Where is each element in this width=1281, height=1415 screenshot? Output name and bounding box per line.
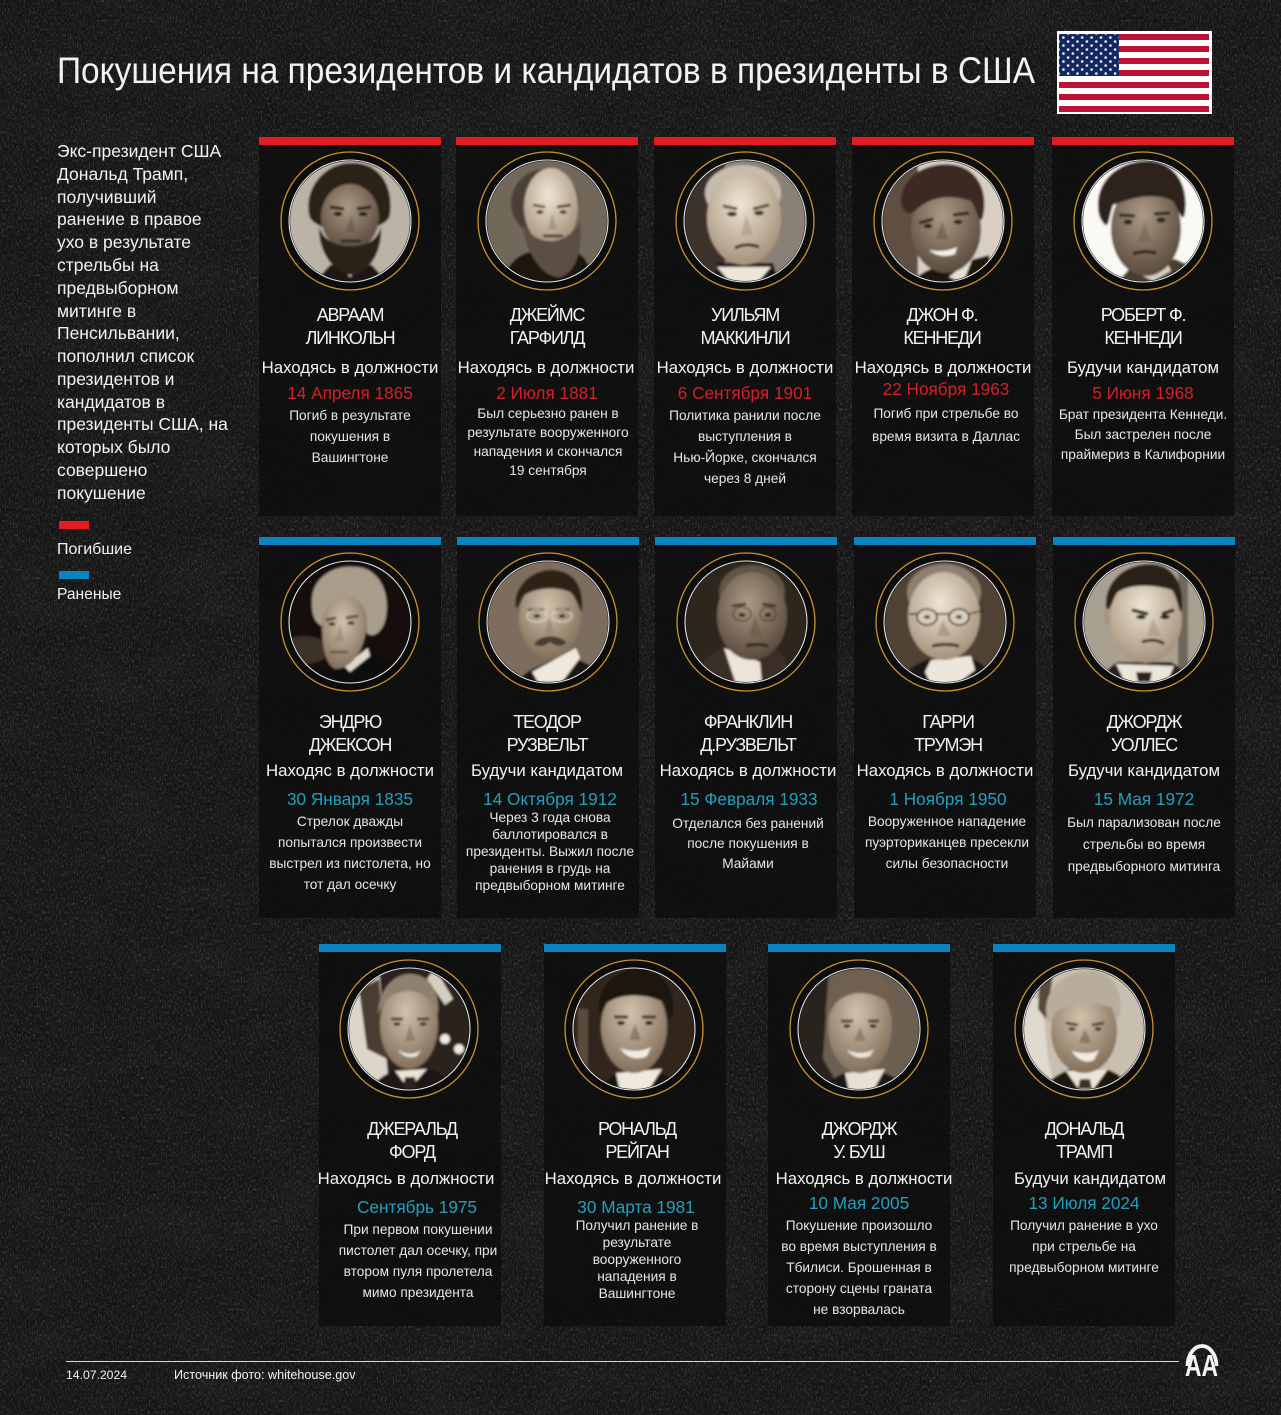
footer: 14.07.2024 <box>66 1368 127 1382</box>
panel: Wallace <box>1053 537 1235 918</box>
name <box>903 305 981 348</box>
portrait: R. Kennedy <box>1074 152 1212 290</box>
description <box>467 406 629 478</box>
description: выстрел из пистолета, но <box>269 856 431 871</box>
description: Был застрелен после <box>1075 427 1211 442</box>
description: Нью-Йорке, скончался <box>673 450 817 465</box>
panel: Trump <box>993 944 1175 1326</box>
description: попытался произвести <box>278 835 422 850</box>
description: Отделался без ранений <box>672 816 824 831</box>
description: При первом покушении <box>344 1222 492 1237</box>
date: 10 Мая 2005 <box>809 1193 909 1213</box>
name <box>1045 1119 1124 1162</box>
intro text: президенты США, на <box>57 414 228 434</box>
date: 15 Февраля 1933 <box>680 789 818 809</box>
name: ТРУМЭН <box>914 735 982 755</box>
portrait: T. Roosevelt <box>479 553 617 691</box>
portrait: J. Kennedy <box>874 152 1012 290</box>
description: Вашингтоне <box>312 450 388 465</box>
description <box>1067 815 1221 874</box>
name: РЕЙГАН <box>605 1141 669 1162</box>
intro text: предвыборном <box>57 278 179 298</box>
status: Находясь в должности <box>458 358 634 377</box>
name: Д.РУЗВЕЛЬТ <box>700 735 797 755</box>
footer <box>66 1361 1179 1382</box>
description <box>865 814 1029 871</box>
date: 22 Ноября 1963 <box>883 379 1009 399</box>
portrait: Reagan <box>565 960 703 1098</box>
legend: Раненые <box>57 586 121 603</box>
description: через 8 дней <box>704 471 786 486</box>
description: баллотировался в <box>492 827 608 842</box>
description: результате вооруженного <box>467 425 629 440</box>
description: 19 сентября <box>509 463 587 478</box>
name <box>507 712 589 755</box>
description: Получил ранение в <box>576 1218 698 1233</box>
description <box>669 408 821 486</box>
description <box>466 810 634 893</box>
intro text: пополнил список <box>57 346 194 366</box>
description <box>576 1218 698 1301</box>
name <box>306 305 395 348</box>
intro text: покушение <box>57 483 146 503</box>
panel: Jackson <box>259 537 441 918</box>
name <box>822 1119 898 1162</box>
name: РОНАЛЬД <box>598 1119 677 1139</box>
description: силы безопасности <box>886 856 1008 871</box>
date: 14 Октября 1912 <box>483 789 617 809</box>
footer: Источник фото: whitehouse.gov <box>174 1368 356 1382</box>
description: пуэрториканцев пресекли <box>865 835 1029 850</box>
name: ДЖОРДЖ <box>1107 712 1183 732</box>
portrait: Truman <box>876 553 1014 691</box>
intro text: которых было <box>57 437 170 457</box>
status: Будучи кандидатом <box>1067 358 1219 377</box>
panel: Bush <box>768 944 952 1326</box>
panel: Ford <box>318 944 501 1326</box>
name: КЕННЕДИ <box>1104 328 1182 348</box>
icon: AA logo: AA <box>1185 1348 1218 1383</box>
name <box>700 305 790 348</box>
portrait: Trump <box>1015 960 1153 1098</box>
description <box>672 816 824 871</box>
date: 6 Сентября 1901 <box>678 383 812 403</box>
description: Через 3 года снова <box>489 810 611 825</box>
intro text: Экс-президент США <box>57 141 222 161</box>
name: У. БУШ <box>833 1142 885 1162</box>
description <box>872 406 1020 444</box>
intro text: стрельбы на <box>57 255 159 275</box>
portrait: Wallace <box>1075 553 1213 691</box>
description: стрельбы во время <box>1083 837 1205 852</box>
portrait: Ford <box>340 960 478 1098</box>
description <box>1059 407 1227 462</box>
status: Находясь в должности <box>855 358 1031 377</box>
name: ДЖЕРАЛЬД <box>367 1119 458 1139</box>
name: ДОНАЛЬД <box>1045 1119 1124 1139</box>
description: вооруженного <box>593 1252 682 1267</box>
intro text: Дональд Трамп, <box>57 164 188 184</box>
name: МАККИНЛИ <box>700 328 790 348</box>
description <box>269 814 431 892</box>
description <box>289 408 411 465</box>
date: Сентябрь 1975 <box>357 1197 477 1217</box>
description: предвыборном митинге <box>475 878 625 893</box>
description: Майами <box>722 856 774 871</box>
description: Погиб в результате <box>289 408 411 423</box>
date: 30 Января 1835 <box>287 789 413 809</box>
name <box>309 712 391 755</box>
panel: Lincoln <box>259 137 441 516</box>
description <box>781 1218 937 1317</box>
description <box>339 1222 497 1300</box>
description <box>1009 1218 1159 1275</box>
name <box>1101 305 1185 348</box>
panel: F. Roosevelt <box>655 537 837 918</box>
portrait: F. Roosevelt <box>677 553 815 691</box>
name: ТЕОДОР <box>513 712 582 732</box>
status: Находясь в должности <box>776 1169 952 1188</box>
portrait: Lincoln <box>281 152 419 290</box>
description: ранения в грудь на <box>490 861 611 876</box>
name: ГАРФИЛД <box>510 328 585 348</box>
date: 15 Мая 1972 <box>1094 789 1194 809</box>
date: 14 Апреля 1865 <box>287 383 413 403</box>
name <box>367 1119 458 1162</box>
name: ГАРРИ <box>922 712 974 732</box>
intro text: получивший <box>57 187 157 207</box>
panel: T. Roosevelt <box>457 537 639 918</box>
description: время визита в Даллас <box>872 429 1020 444</box>
description: Погиб при стрельбе во <box>873 406 1019 421</box>
description: праймериз в Калифорнии <box>1061 447 1225 462</box>
date: 2 Июля 1881 <box>496 383 598 403</box>
status: Находясь в должности <box>657 358 833 377</box>
name: УОЛЛЕС <box>1111 735 1178 755</box>
name <box>598 1119 677 1162</box>
panel: McKinley <box>654 137 836 516</box>
description: нападения и скончался <box>474 444 622 459</box>
panel: Reagan <box>544 944 726 1326</box>
name: ДЖЕЙМС <box>510 304 585 325</box>
portrait: Garfield <box>478 152 616 290</box>
description: Был серьезно ранен в <box>477 406 619 421</box>
description: не взорвалась <box>813 1302 905 1317</box>
panel: R. Kennedy <box>1052 137 1234 516</box>
date: 30 Марта 1981 <box>577 1197 695 1217</box>
status: Находясь в должности <box>545 1169 721 1188</box>
intro text <box>57 141 228 503</box>
status: Находясь в должности <box>318 1169 494 1188</box>
intro text: совершено <box>57 460 147 480</box>
description: Был парализован после <box>1067 815 1221 830</box>
portrait: Jackson <box>278 553 419 691</box>
description: выступления в <box>698 429 792 444</box>
icon: US flag <box>1057 31 1212 114</box>
name: РУЗВЕЛЬТ <box>507 735 589 755</box>
status: Находясь в должности <box>262 358 438 377</box>
description: предвыборного митинга <box>1068 859 1221 874</box>
name <box>510 304 585 348</box>
name: ФОРД <box>389 1142 436 1162</box>
name <box>1107 712 1183 755</box>
status: Будучи кандидатом <box>1014 1169 1166 1188</box>
name: ДЖЕКСОН <box>309 735 391 755</box>
status: Находяс в должности <box>266 761 434 780</box>
description: президенты. Выжил после <box>466 844 634 859</box>
name: РОБЕРТ Ф. <box>1101 305 1185 325</box>
status: Будучи кандидатом <box>1068 761 1220 780</box>
description: пистолет дал осечку, при <box>339 1243 497 1258</box>
intro text: Пенсильвании, <box>57 323 180 343</box>
description: мимо президента <box>362 1285 474 1300</box>
name: ЛИНКОЛЬН <box>306 328 395 348</box>
description: Получил ранение в ухо <box>1010 1218 1158 1233</box>
name: АВРААМ <box>317 305 384 325</box>
description: втором пуля пролетела <box>344 1264 493 1279</box>
status: Будучи кандидатом <box>471 761 623 780</box>
description: Тбилиси. Брошенная в <box>786 1260 932 1275</box>
description: после покушения в <box>687 836 809 851</box>
intro text: ухо в результате <box>57 232 191 252</box>
panel: Truman <box>854 537 1036 918</box>
description: Брат президента Кеннеди. <box>1059 407 1227 422</box>
description: результате <box>603 1235 671 1250</box>
date: 13 Июля 2024 <box>1028 1193 1140 1213</box>
intro text: ранение в правое <box>57 209 202 229</box>
title: Покушения на президентов и кандидатов в президенты в США <box>57 50 1035 91</box>
name: КЕННЕДИ <box>903 328 981 348</box>
portrait: McKinley <box>676 152 814 290</box>
name: ДЖОН Ф. <box>907 305 978 325</box>
name: ЭНДРЮ <box>319 712 382 732</box>
description: Покушение произошло <box>786 1218 933 1233</box>
description: Политика ранили после <box>669 408 821 423</box>
description: Вооруженное нападение <box>868 814 1026 829</box>
legend: Погибшие <box>57 541 132 558</box>
panel: J. Kennedy <box>852 137 1034 516</box>
description: покушения в <box>310 429 390 444</box>
date: 5 Июня 1968 <box>1092 383 1194 403</box>
name: ФРАНКЛИН <box>704 712 792 732</box>
name <box>914 712 982 755</box>
description: сторону сцены граната <box>786 1281 932 1296</box>
name: ТРАМП <box>1056 1142 1112 1162</box>
name: УИЛЬЯМ <box>711 305 779 325</box>
description: тот дал осечку <box>304 877 396 892</box>
intro text: президентов и <box>57 369 174 389</box>
description: во время выступления в <box>781 1239 937 1254</box>
status: Находясь в должности <box>660 761 836 780</box>
portrait: Bush <box>790 960 928 1098</box>
description: Вашингтоне <box>599 1286 675 1301</box>
description: нападения в <box>597 1269 677 1284</box>
name: ДЖОРДЖ <box>822 1119 898 1139</box>
intro text: кандидатов в <box>57 392 165 412</box>
name <box>700 712 797 755</box>
legend <box>57 521 132 603</box>
panel: Garfield <box>456 137 638 516</box>
status: Находясь в должности <box>857 761 1033 780</box>
description: предвыборном митинге <box>1009 1260 1159 1275</box>
intro text: митинге в <box>57 301 136 321</box>
description: при стрельбе на <box>1032 1239 1136 1254</box>
description: Стрелок дважды <box>297 814 403 829</box>
date: 1 Ноября 1950 <box>889 789 1007 809</box>
